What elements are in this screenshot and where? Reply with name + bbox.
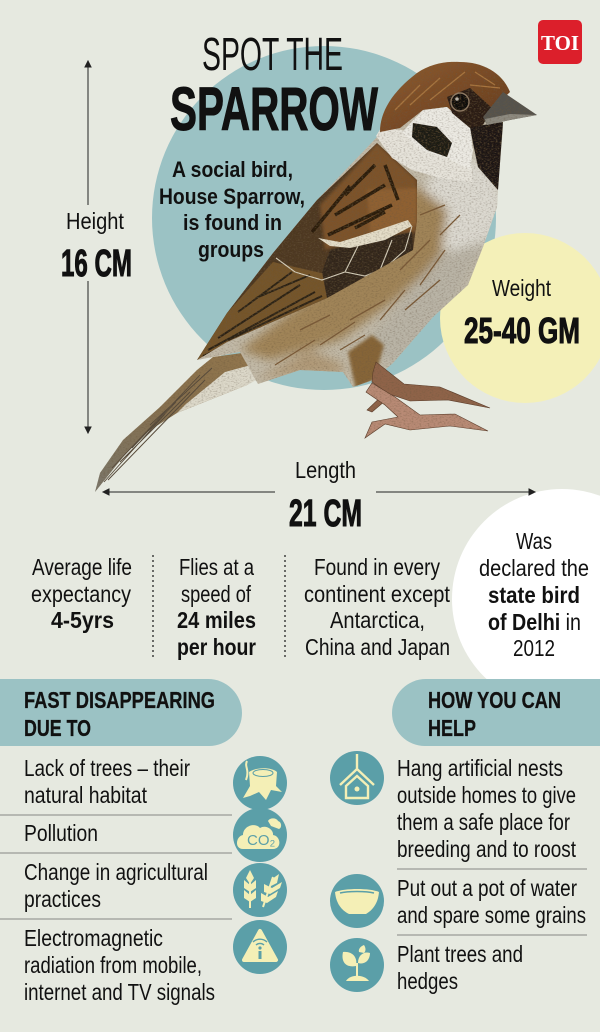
cause: trees: Lack of trees – their — [24, 755, 190, 781]
thigh — [348, 335, 384, 390]
body — [197, 110, 503, 387]
fact: speed: per hour — [177, 634, 256, 660]
tip: water — [397, 875, 586, 928]
icon: CO2 cloud: CO₂ — [247, 832, 276, 849]
logo: TOI — [538, 20, 582, 64]
black bib — [470, 122, 503, 190]
dark secondaries — [322, 232, 413, 298]
cause: agriculture: Change in agricultural — [24, 859, 208, 885]
tail — [95, 345, 300, 492]
fact: range: Antarctica, — [330, 607, 425, 633]
cause: radiation: Electromagnetic — [24, 925, 163, 951]
fact: range: Found in every — [314, 554, 440, 580]
cause: agriculture: practices — [24, 886, 101, 912]
icon: CO2 cloud — [233, 808, 287, 862]
intro text: A social bird, — [172, 157, 293, 182]
wing feather edges — [276, 226, 412, 280]
yellow weight circle — [440, 233, 600, 403]
teal circle — [152, 46, 496, 390]
length measure: Length — [295, 457, 356, 483]
length arrow — [103, 489, 535, 495]
cause: radiation: internet and TV signals — [24, 979, 215, 1005]
cause: radiation — [24, 925, 215, 1005]
length measure: 21 CM — [289, 493, 362, 535]
cause: trees — [24, 755, 190, 808]
fact: life expectancy: 4-5yrs — [51, 607, 114, 633]
title — [170, 28, 378, 143]
intro text: House Sparrow, — [159, 184, 305, 209]
fact: speed: 24 miles — [177, 607, 256, 633]
flank — [240, 185, 448, 360]
shoulder — [320, 143, 417, 250]
height arrow — [85, 61, 91, 433]
title: SPOT THE — [202, 28, 343, 80]
white cheek — [402, 107, 473, 170]
panel: how you can help — [330, 679, 600, 994]
fact: state bird — [479, 528, 589, 661]
icon: tree stump — [233, 756, 287, 810]
black cheek patch — [412, 123, 452, 157]
eye — [451, 93, 469, 111]
belly — [378, 240, 484, 360]
heading tab — [392, 679, 600, 746]
tip: trees: Plant trees and — [397, 941, 523, 967]
fact: speed: Flies at a — [179, 554, 254, 580]
heading tab — [0, 679, 242, 746]
icon: bowl — [330, 874, 384, 928]
fact: range: continent except — [304, 581, 451, 607]
fact: life expectancy: expectancy — [31, 581, 131, 607]
cause: radiation: radiation from mobile, — [24, 952, 202, 978]
tip: trees: hedges — [397, 968, 458, 994]
panel: how you can help: HELP — [428, 715, 476, 741]
illustration: sparrow — [95, 62, 537, 492]
height measure: Height — [66, 208, 125, 234]
tip: nests: Hang artificial nests — [397, 755, 563, 781]
head cap — [380, 62, 510, 132]
cause: pollution: Pollution — [24, 820, 98, 846]
fact: range — [304, 554, 451, 660]
wing — [197, 143, 417, 360]
weight label — [464, 275, 580, 351]
icon: radiation warning — [233, 920, 287, 974]
fact: speed — [177, 554, 256, 660]
fact: speed: speed of — [181, 581, 251, 607]
wing bar — [318, 220, 412, 248]
logo: TOI: TOI — [541, 31, 579, 55]
intro text — [159, 157, 305, 262]
fact: range: China and Japan — [305, 634, 450, 660]
panel: how you can help: HOW YOU CAN — [428, 687, 561, 713]
cause: trees: natural habitat — [24, 782, 148, 808]
tip: trees — [397, 941, 523, 994]
cause: agriculture — [24, 859, 208, 912]
tip: nests — [397, 755, 576, 862]
panel: fast disappearing due to: FAST DISAPPEARING — [24, 687, 215, 713]
white state bird circle — [452, 489, 600, 709]
fact: state bird: state bird — [488, 582, 580, 608]
primaries — [197, 262, 330, 360]
fact: life expectancy: Average life — [32, 554, 132, 580]
chest — [422, 157, 502, 253]
height measure: 16 CM — [61, 243, 132, 285]
icon: seedling — [330, 938, 384, 992]
height measure — [60, 61, 136, 433]
fact: life expectancy — [31, 554, 132, 633]
icon: wheat — [233, 863, 287, 917]
icon: birdhouse — [330, 751, 384, 805]
white collar — [376, 128, 472, 182]
beak — [483, 92, 537, 125]
intro text: is found in — [183, 210, 282, 235]
panel: fast disappearing due to — [0, 679, 287, 1005]
length measure — [103, 457, 535, 535]
legs and feet — [367, 362, 490, 412]
weight label: Weight — [492, 275, 552, 301]
panel: fast disappearing due to: DUE TO — [24, 715, 91, 741]
fact: state bird: of Delhi in — [488, 609, 581, 635]
title: SPARROW — [170, 75, 378, 143]
fact: state bird: Was — [516, 528, 552, 554]
fact: state bird: 2012 — [513, 635, 555, 661]
intro text: groups — [198, 237, 264, 262]
